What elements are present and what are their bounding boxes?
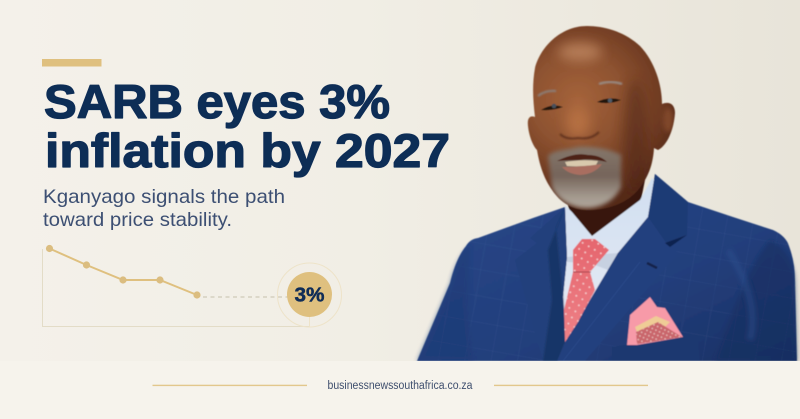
- title: [44, 75, 450, 177]
- title: SARB eyes 3%: [44, 75, 390, 128]
- right lapel and collar: [557, 217, 678, 361]
- shirt: [562, 178, 664, 345]
- accent bar: [42, 59, 102, 66]
- footer rule: right: [494, 385, 648, 386]
- eyes: [541, 106, 563, 110]
- chest pocket: [612, 335, 700, 361]
- beard: [548, 147, 621, 208]
- tie: [564, 239, 609, 342]
- line chart: inflation path to 3%: [42, 245, 309, 326]
- nose: [560, 132, 599, 138]
- head: [528, 26, 675, 210]
- brows: [538, 91, 556, 96]
- lapel buttonhole: [647, 263, 657, 268]
- title: inflation by 2027: [45, 124, 450, 177]
- target badge: 3%: [278, 263, 342, 327]
- neck: [560, 180, 645, 238]
- portrait of Kganyago: [417, 26, 797, 361]
- subtitle: [43, 186, 285, 231]
- website address: businessnewssouthafrica.co.za: [328, 380, 473, 392]
- mouth: [557, 154, 607, 162]
- shading: [558, 43, 602, 61]
- subtitle: Kganyago signals the path: [43, 186, 285, 208]
- pocket square: [627, 297, 683, 345]
- footer band: [0, 361, 800, 419]
- target badge: 3%: 3%: [294, 284, 325, 306]
- left lapel: [515, 207, 567, 361]
- subtitle: toward price stability.: [43, 209, 232, 231]
- footer rule: left: [152, 385, 307, 386]
- jacket: [417, 174, 797, 361]
